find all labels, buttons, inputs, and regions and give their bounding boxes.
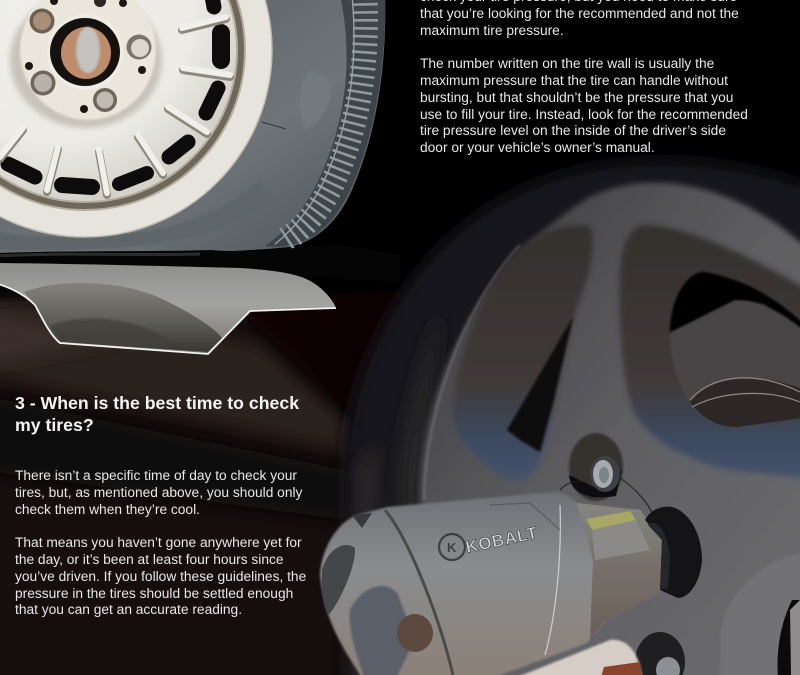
right spoke window bbox=[620, 225, 800, 480]
left spoke window bbox=[453, 225, 593, 481]
brake rotor bbox=[670, 301, 800, 427]
tire reflection bbox=[0, 263, 336, 354]
air hose wires bbox=[560, 478, 652, 513]
hub bbox=[10, 0, 162, 128]
tool back detail bbox=[322, 545, 355, 615]
reflected wheel bbox=[24, 283, 222, 352]
body seams bbox=[385, 510, 453, 675]
brand logo and name bbox=[439, 523, 539, 560]
gloved hand bbox=[510, 640, 642, 675]
sidewall details bbox=[300, 72, 330, 130]
rear housing bbox=[320, 492, 660, 675]
lug nut bbox=[569, 433, 623, 501]
brand logo and name: KOBALT bbox=[464, 523, 539, 557]
lower lug nut bbox=[635, 632, 685, 675]
tire sidewall bbox=[345, 160, 800, 675]
socket bbox=[645, 507, 702, 598]
flat tire wheel bbox=[0, 0, 385, 255]
white outline bbox=[0, 283, 336, 354]
heading: section 3: 3 - When is the best time to check my tires? bbox=[15, 393, 299, 435]
brand logo and name: K bbox=[447, 540, 457, 555]
lower spoke opening bbox=[720, 553, 800, 675]
ground contact gap bbox=[0, 245, 400, 282]
tread blocks bbox=[285, 0, 366, 240]
wheel slots bbox=[8, 0, 221, 187]
impact wrench bbox=[320, 492, 702, 675]
warning label bbox=[586, 511, 636, 530]
rim lip bbox=[0, 0, 272, 237]
right wheel bbox=[345, 160, 800, 675]
wheel spokes bbox=[0, 17, 230, 195]
text block: section 3 body: There isn’t a specific time of day to check your tires, but, as mentioned above, you should only check them when they’re cool. That means you haven’t gone anywhere yet for the day, or it’s been at least four hours since you’ve driven. If you follow these guidelines, the pressure in the tires should be settled enough that you can get an accurate reading. bbox=[15, 468, 306, 617]
lug bolts bbox=[25, 0, 152, 113]
alloy rim bbox=[420, 183, 800, 675]
front section bbox=[577, 503, 662, 640]
dim car body, lower left bbox=[0, 290, 400, 675]
tire bbox=[0, 0, 385, 255]
